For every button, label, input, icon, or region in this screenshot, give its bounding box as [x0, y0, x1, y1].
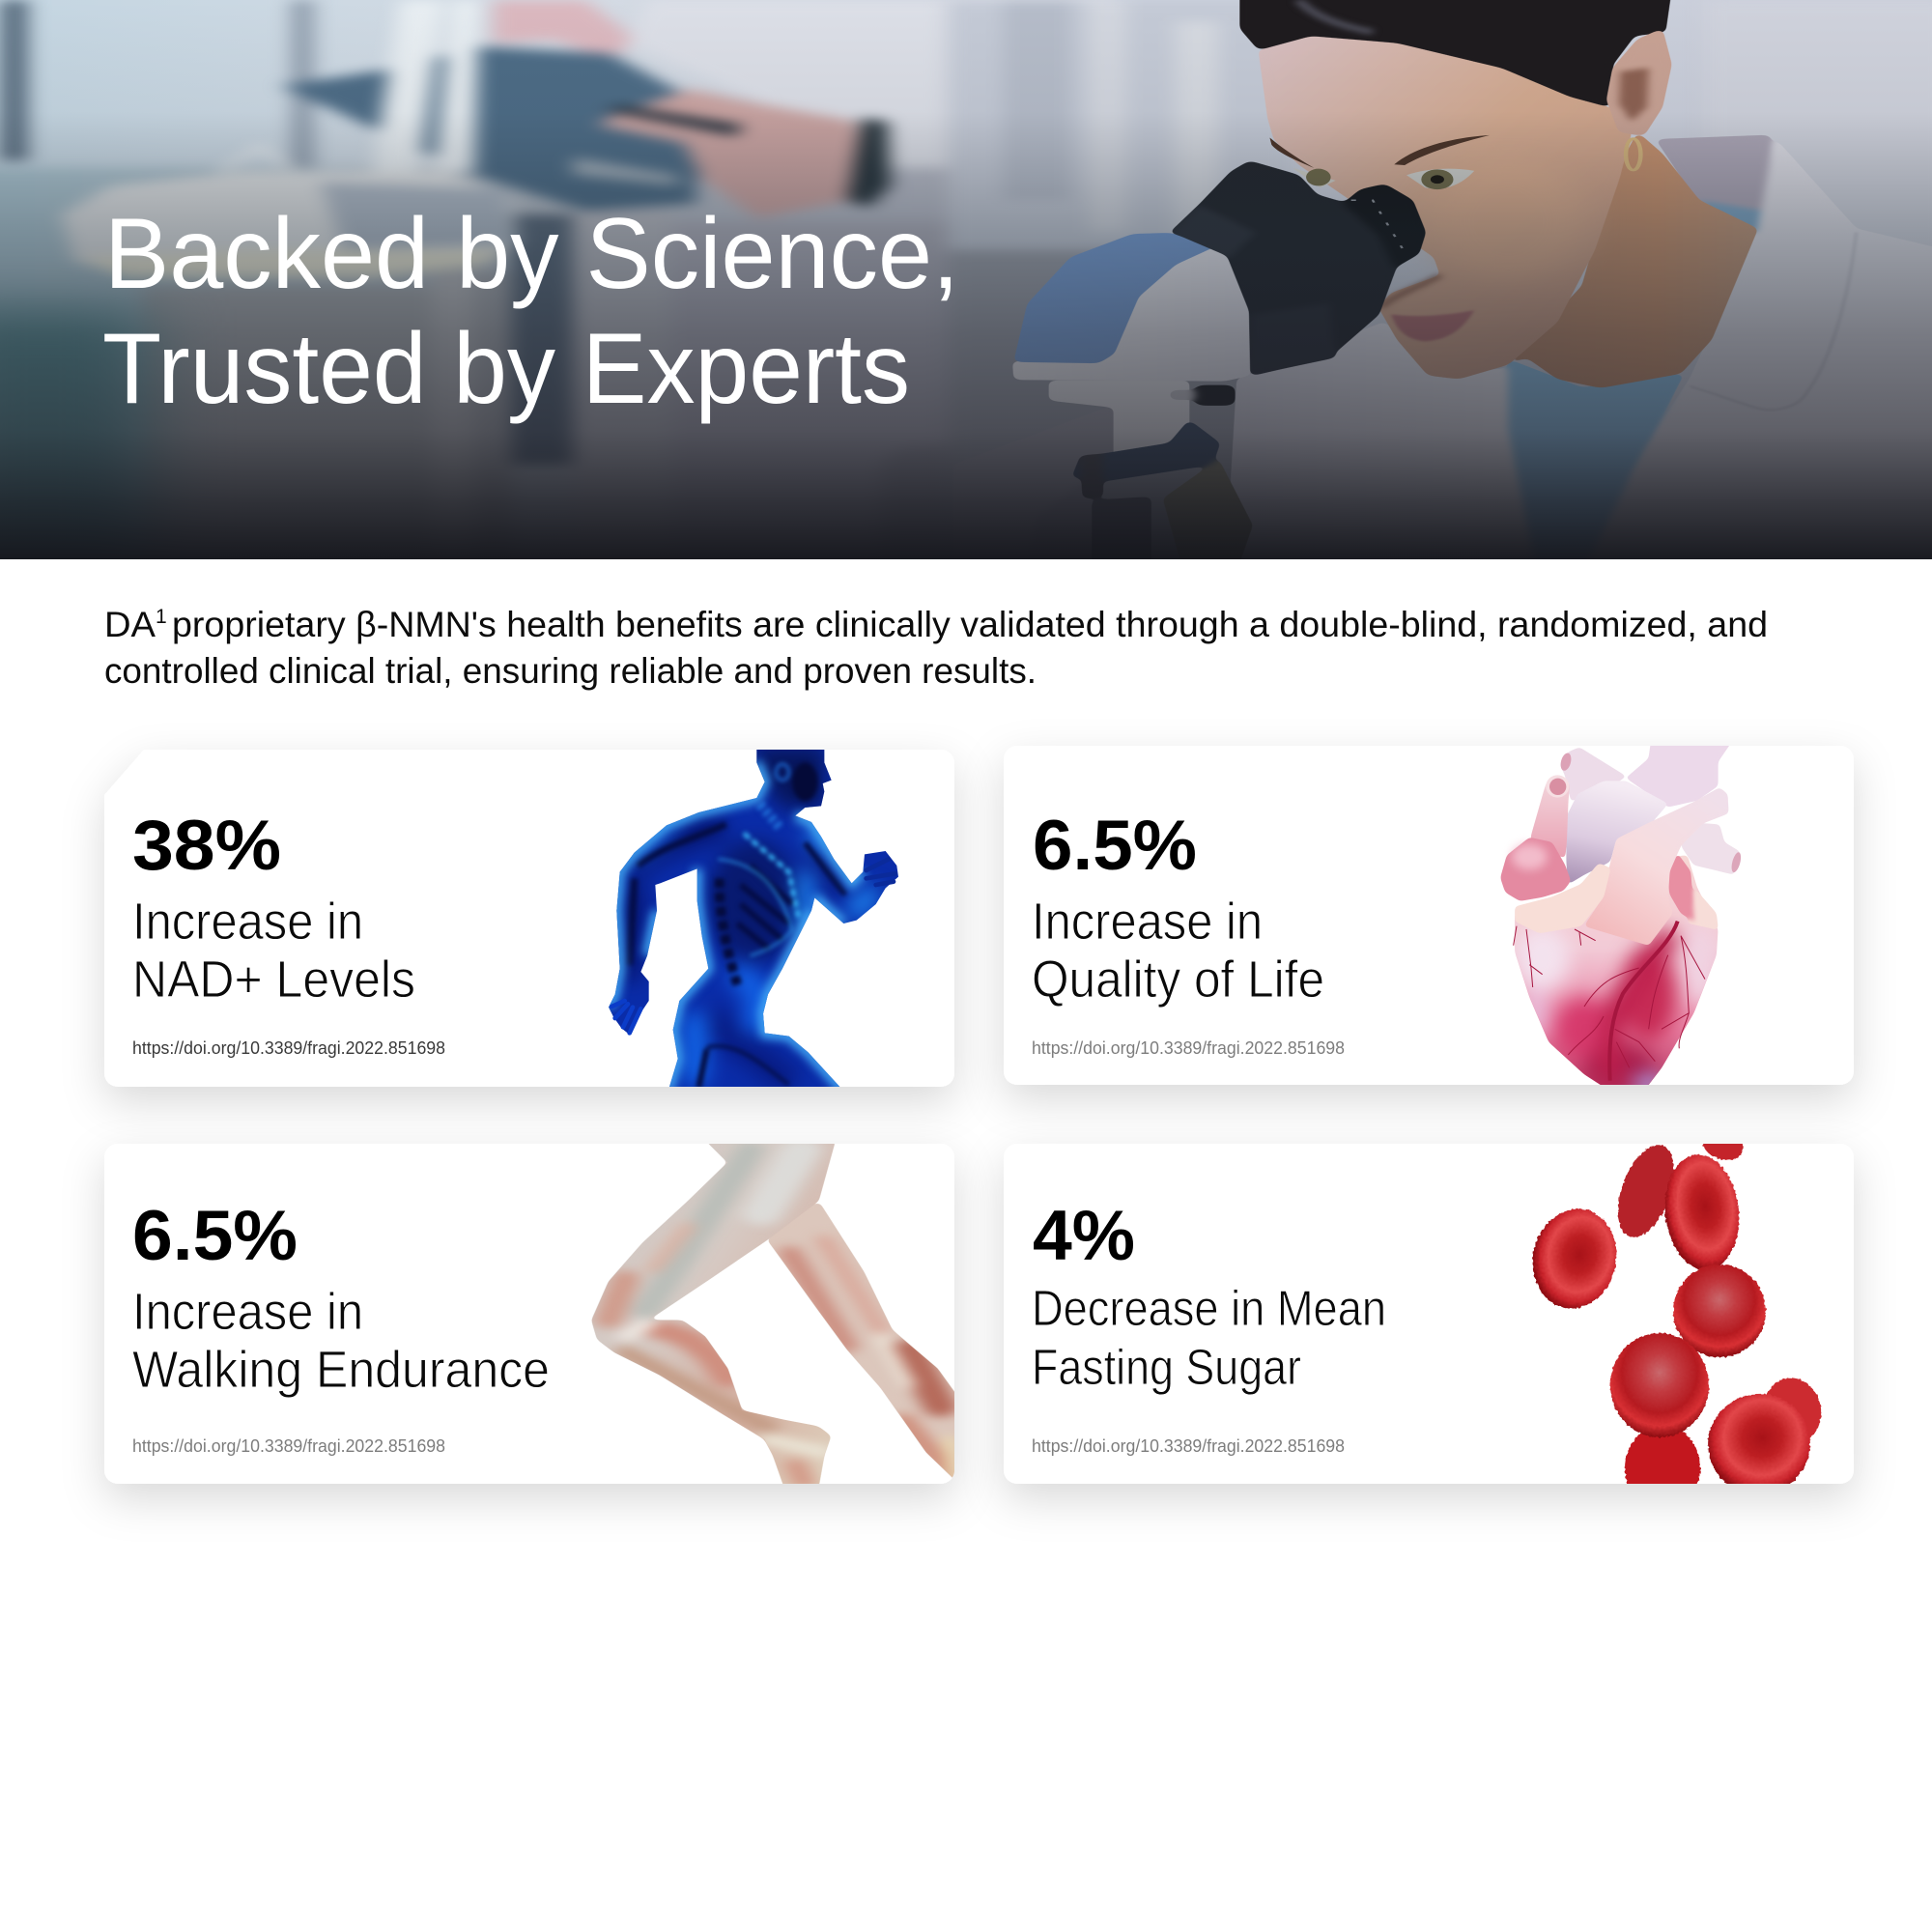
atrium right [1668, 854, 1719, 930]
title: Trusted by Experts [102, 313, 910, 425]
collar seam [1843, 234, 1857, 301]
source link: https://doi.org/10.3389/fragi.2022.851698 [132, 1436, 445, 1456]
eyes [1293, 168, 1474, 189]
title [102, 198, 959, 425]
microscope [1012, 162, 1426, 547]
image: blue running man [599, 743, 908, 1094]
ear [1606, 29, 1671, 136]
source link: https://doi.org/10.3389/fragi.2022.851698 [132, 1038, 445, 1058]
heart body [1515, 855, 1718, 1089]
rear leg [767, 1201, 963, 1488]
source link: https://doi.org/10.3389/fragi.2022.851698 [1032, 1436, 1345, 1456]
label [1032, 893, 1324, 1009]
rim light [609, 762, 863, 1091]
label: Decrease in Mean [1032, 1281, 1386, 1337]
earring [1626, 139, 1640, 170]
label: Increase in [132, 893, 363, 951]
title: Backed by Science, [104, 198, 959, 310]
dark gradient overlay [0, 0, 1932, 559]
label: Walking Endurance [132, 1341, 550, 1399]
focus knob [1171, 385, 1235, 406]
cream cuff [1515, 864, 1610, 933]
gray housing [1012, 243, 1251, 381]
lab coat [1231, 135, 1932, 514]
intro paragraph: 1 [156, 606, 167, 628]
label: Fasting Sugar [1032, 1340, 1301, 1396]
stat: 6.5% [1033, 807, 1197, 885]
hero banner photo [0, 0, 1932, 593]
dark head [1169, 160, 1426, 376]
hair parting highlight [1298, 0, 1373, 32]
stat: 6.5% [132, 1197, 298, 1275]
teal haze [0, 307, 148, 593]
card background [104, 750, 954, 1087]
hair [1240, 0, 1671, 107]
cheek shading [1430, 255, 1431, 256]
woman scientist [1231, 0, 1932, 514]
blurred lab background [0, 0, 952, 506]
right background streaks [943, 0, 1267, 500]
panel: walking endurance card [104, 1140, 963, 1488]
panel: quality of life card [1004, 736, 1854, 1094]
panel: fasting sugar card [1004, 1123, 1854, 1512]
panel: NAD+ levels card [104, 743, 954, 1094]
vessels behind [1560, 736, 1741, 874]
label: Increase in [1032, 893, 1263, 951]
aortic arch [1567, 781, 1668, 884]
eyebrows [1269, 135, 1490, 168]
nose shade [1380, 275, 1440, 307]
label [132, 1283, 550, 1399]
label: Quality of Life [1032, 951, 1324, 1009]
heart colouring [1515, 923, 1718, 1094]
pulmonary trunk [1584, 787, 1728, 946]
source link: https://doi.org/10.3389/fragi.2022.851698 [1032, 1038, 1345, 1058]
face [1259, 36, 1632, 379]
stem [1049, 381, 1190, 452]
auricle highlight [1512, 844, 1548, 869]
label: NAD+ Levels [132, 951, 415, 1009]
coronary vessels [1514, 922, 1705, 1081]
fingers [611, 859, 895, 1033]
base arm [953, 404, 1126, 586]
card background [1004, 1144, 1854, 1484]
card background [104, 1144, 954, 1484]
card background [1004, 746, 1854, 1085]
image: heart [1500, 736, 1743, 1094]
label: Increase in [132, 1283, 363, 1341]
stat: 4% [1033, 1197, 1135, 1275]
stat: 38% [132, 807, 281, 885]
image: red blood cells [1523, 1123, 1829, 1512]
front leg [591, 1140, 836, 1488]
objective turret [1073, 422, 1252, 542]
intro paragraph [104, 604, 1768, 691]
vena cava tube [1531, 776, 1570, 859]
label [1032, 1281, 1386, 1396]
blue cap [1014, 233, 1222, 363]
lips [1391, 310, 1474, 341]
left auricle [1500, 838, 1571, 901]
label [132, 893, 415, 1009]
intro paragraph: DA [104, 604, 156, 644]
intro paragraph: controlled clinical trial, ensuring reliable and proven results. [104, 650, 1037, 691]
neck [1508, 132, 1758, 387]
image: leg muscles [591, 1140, 963, 1488]
intro paragraph: proprietary β-NMN's health benefits are clinically validated through a double-blind, randomized, and [172, 604, 1768, 644]
eyepiece scale [1351, 200, 1404, 250]
